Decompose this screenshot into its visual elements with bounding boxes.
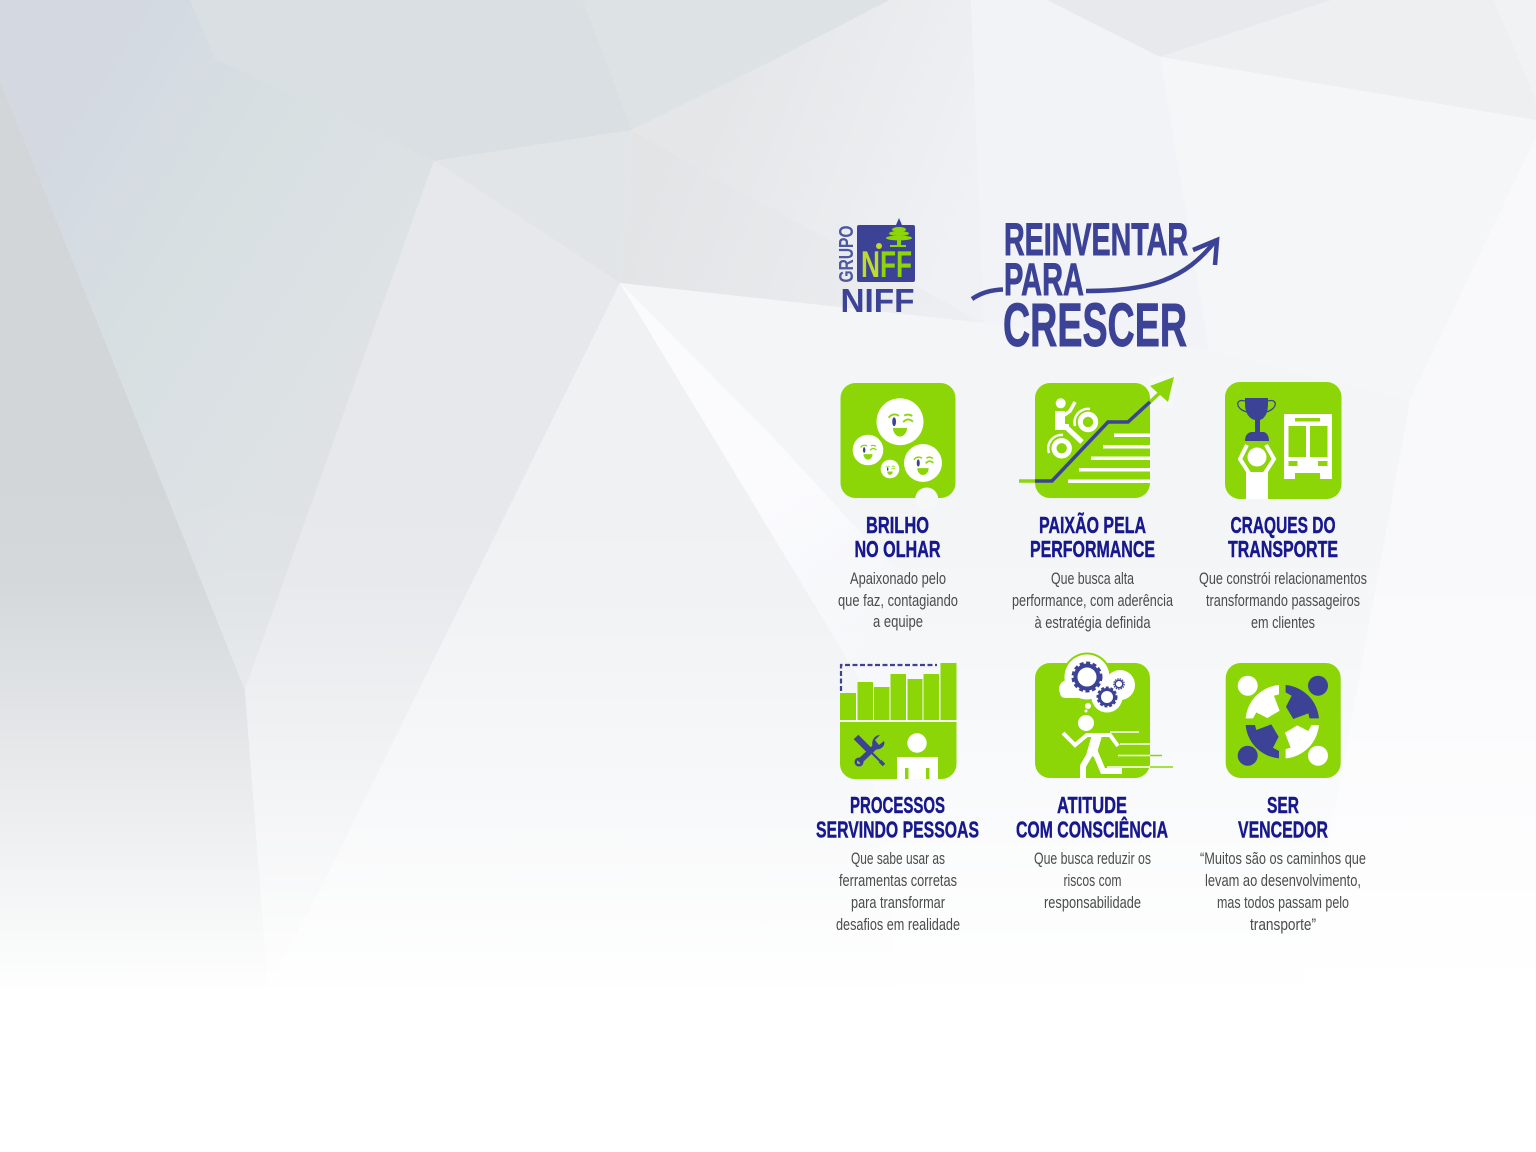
description: Que constrói relacionamentos [1199,570,1367,588]
icon: wheelchair climbing stairs [1019,372,1178,498]
description: Que busca reduzir os [1034,850,1151,868]
description [1034,850,1151,912]
description [1199,570,1367,632]
heading: CRAQUES DO [1230,512,1336,538]
heading [816,792,979,842]
description: responsabilidade [1044,894,1141,912]
panel: Paixão pela performance [1012,372,1178,632]
heading: VENCEDOR [1238,816,1328,842]
description [1012,570,1174,632]
heading [1030,511,1155,562]
icon: running person with gears [1035,652,1173,778]
description: riscos com [1064,872,1122,890]
arrow: growth swoosh [972,240,1217,299]
description: Que busca alta [1051,570,1135,588]
heading: TRANSPORTE [1228,536,1338,562]
description: transformando passageiros [1206,592,1360,610]
heading: COM CONSCIÊNCIA [1016,816,1168,842]
description: levam ao desenvolvimento, [1205,872,1361,890]
heading: ATITUDE [1057,792,1127,818]
heading [1238,792,1328,842]
description: transporte” [1250,916,1316,934]
icon: tree in logo [886,227,912,247]
heading: PERFORMANCE [1030,536,1155,562]
heading [854,512,941,562]
description: Que sabe usar as [851,850,945,868]
heading [1228,512,1338,562]
panel: Ser vencedor [1200,663,1366,934]
description: performance, com aderência [1012,592,1174,610]
heading: SER [1267,792,1299,818]
heading [1016,792,1168,842]
description: ferramentas corretas [839,872,957,890]
heading: BRILHO [866,512,929,538]
description [1200,850,1366,934]
description: Apaixonado pelo [850,570,946,588]
description: para transformar [851,894,945,912]
logo word: GRUPO: GRUPO [836,226,858,282]
heading: SERVINDO PESSOAS [816,816,979,842]
panel: Atitude com consciência [1016,652,1173,912]
description: “Muitos são os caminhos que [1200,850,1366,868]
heading: PAIXÃO PELA [1039,511,1146,538]
description: a equipe [873,613,923,631]
description: desafios em realidade [836,916,960,934]
icon: trophy, person and bus [1225,382,1342,499]
logo monogram: NFF [861,244,912,285]
icon: bar chart, tools and person [840,663,956,779]
title: Reinventar para Crescer [972,214,1217,359]
logo word: NIFF: NIFF [840,282,914,319]
title: Reinventar para Crescer: CRESCER [1003,291,1187,359]
title: Reinventar para Crescer: REINVENTAR [1004,214,1188,265]
panel: Processos servindo pessoas [816,663,979,934]
description [836,850,960,934]
description: à estratégia definida [1034,614,1151,632]
logo: Grupo NIFF [836,218,915,319]
icon: soccer ball and people [1226,663,1341,778]
panel: Craques do transporte [1199,382,1367,632]
panel: Brilho no olhar [838,383,958,631]
heading: PROCESSOS [850,792,945,818]
heading: NO OLHAR [854,536,941,562]
description: mas todos passam pelo [1217,894,1349,912]
description [838,570,958,631]
description: em clientes [1251,614,1315,632]
icon: smiling faces [840,383,956,510]
title: Reinventar para Crescer: PARA [1004,254,1084,305]
description: que faz, contagiando [838,592,958,610]
